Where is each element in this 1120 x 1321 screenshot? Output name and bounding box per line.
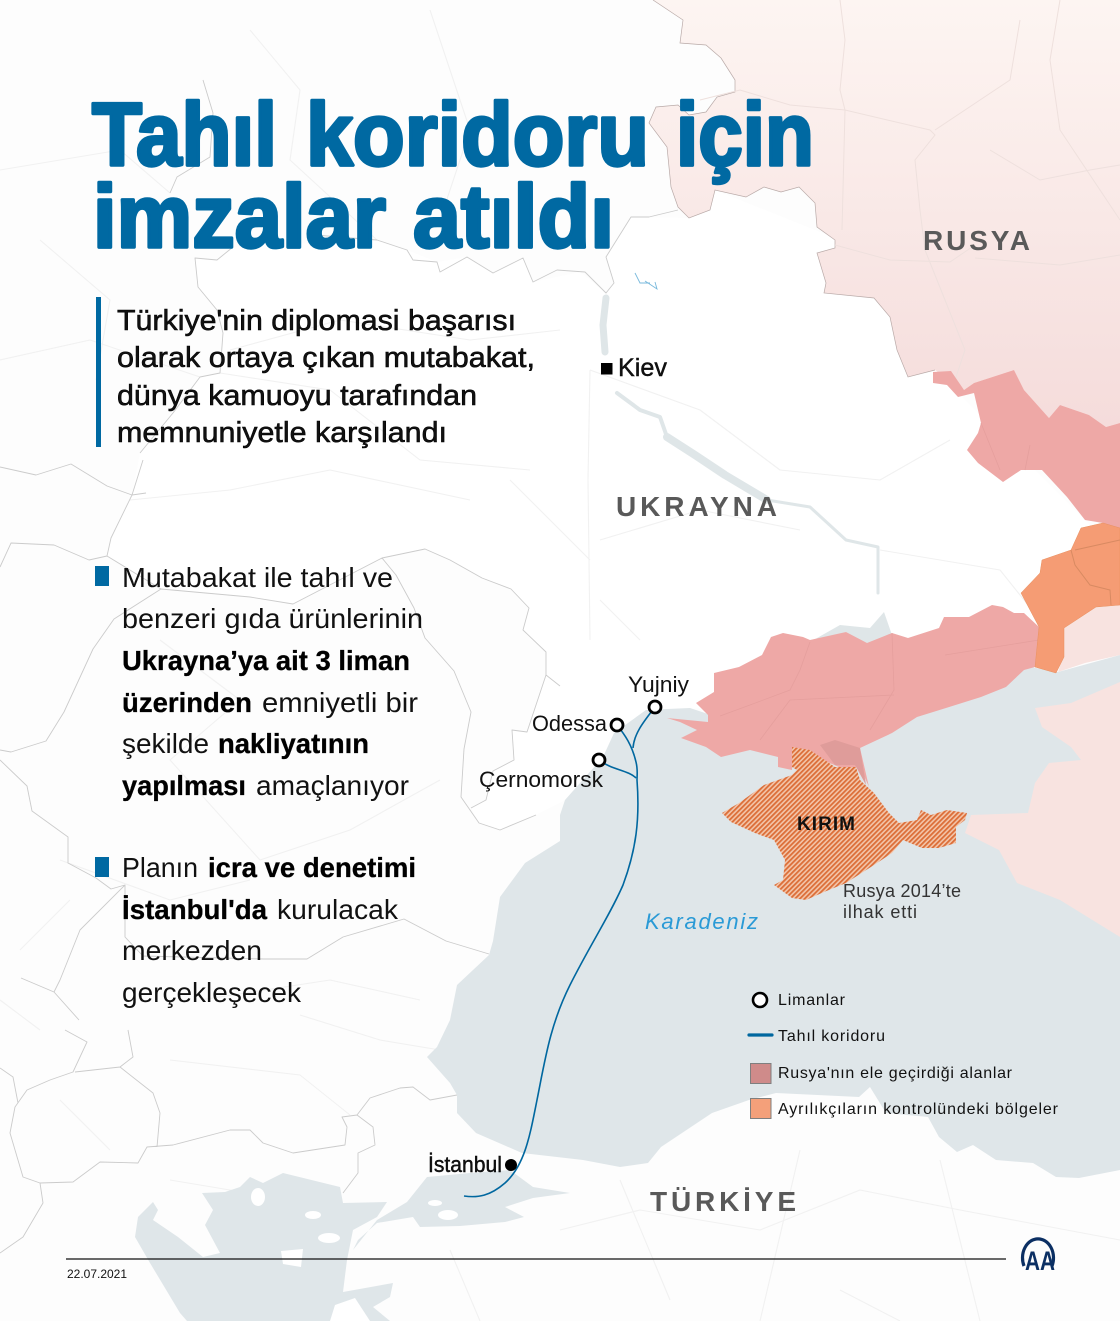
marker: Istanbul <box>505 1159 517 1171</box>
annotation: Crimea annexation <box>843 881 961 922</box>
icon: AA logo <box>1022 1239 1055 1276</box>
bullet text 1: benzeri gıda ürünlerinin <box>122 603 423 634</box>
bullet text 1: emniyetli bir <box>262 687 418 718</box>
legend: corridor: Tahıl koridoru <box>778 1028 885 1045</box>
bullet square 2 <box>95 857 109 877</box>
region: seized south <box>667 605 1039 787</box>
lead text: Türkiye'nin diplomasi başarısı <box>117 305 516 337</box>
region: Crimea <box>722 747 967 900</box>
label: Yujniy: Yujniy <box>628 672 689 697</box>
legend: ports: Limanlar <box>778 992 846 1009</box>
title: atıldı <box>413 166 614 266</box>
bullet text 2: Planın <box>122 852 198 883</box>
legend: separatist regions: Ayrılıkçıların kontrolündeki bölgeler <box>778 1101 1059 1118</box>
title: için <box>676 84 814 184</box>
lead text <box>117 305 535 449</box>
water: Sea of Marmara <box>353 1170 570 1250</box>
title: koridoru <box>306 84 649 184</box>
legend <box>749 992 1059 1118</box>
annotation: Crimea annexation: Rusya 2014’te <box>843 881 961 901</box>
label: Kiev: Kiev <box>618 354 667 382</box>
marker: Kiev <box>601 363 612 374</box>
bullet text 1: Ukrayna’ya ait 3 liman <box>122 645 410 676</box>
bullet text 2: gerçekleşecek <box>122 977 302 1008</box>
bullet text 1: nakliyatının <box>218 728 369 759</box>
bullet text 2: merkezden <box>122 935 262 966</box>
bullet square 1 <box>95 566 109 586</box>
title <box>92 84 814 266</box>
rivers <box>603 273 892 645</box>
lead text: olarak ortaya çıkan mutabakat, <box>117 342 535 374</box>
legend: seized areas: Rusya'nın ele geçirdiği alanlar <box>778 1065 1013 1082</box>
icon: AA logo: AA <box>1025 1246 1055 1276</box>
port marker: Yujniy <box>649 701 661 713</box>
bullet text 1: şekilde <box>122 728 209 759</box>
port marker: Odessa <box>611 719 623 731</box>
region: seized north-east <box>933 370 1120 530</box>
water: Black Sea and Azov <box>427 655 1120 1178</box>
label: Karadeniz: Karadeniz <box>645 909 758 934</box>
port marker: Cernomorsk <box>593 754 605 766</box>
border between separatist regions <box>1071 540 1120 605</box>
lead text: dünya kamuoyu tarafından <box>117 380 477 412</box>
region: separatist-controlled <box>1021 523 1120 673</box>
label: Rusya: RUSYA <box>923 225 1030 256</box>
annotation: Crimea annexation: ilhak etti <box>843 902 917 922</box>
label: Cernomorsk: Çernomorsk <box>479 767 604 792</box>
label: Istanbul: İstanbul <box>428 1152 502 1177</box>
label: Odessa: Odessa <box>532 711 608 736</box>
bullet text 1: üzerinden <box>122 687 252 718</box>
label: Kırım: KIRIM <box>797 814 855 835</box>
title: imzalar <box>93 166 386 266</box>
title: Tahıl <box>92 84 277 184</box>
river and region lines on seized area <box>720 642 810 716</box>
bullet text 1: amaçlanıyor <box>256 770 409 801</box>
bullet text 1: Mutabakat ile tahıl ve <box>122 562 393 593</box>
region: southern Russia, Rostov <box>1058 605 1120 672</box>
footer rule <box>66 1258 1006 1260</box>
lead accent bar <box>96 297 101 447</box>
label: Ukrayna: UKRAYNA <box>616 491 777 522</box>
bullet text 2: İstanbul'da <box>122 894 267 925</box>
date: 22.07.2021 <box>67 1267 127 1281</box>
bullet text 2: icra ve denetimi <box>208 852 416 883</box>
grain corridor route <box>464 707 655 1197</box>
region: southern Russia, Krasnodar <box>965 682 1120 937</box>
water: Aegean Sea <box>135 1173 458 1321</box>
lead text: memnuniyetle karşılandı <box>117 417 447 449</box>
Russia internal roads <box>700 0 1120 380</box>
region: Russia <box>649 0 1120 427</box>
bullet text 1 <box>122 562 423 801</box>
label: Türkiye: TÜRKİYE <box>650 1186 796 1217</box>
bullet text 2: kurulacak <box>277 894 399 925</box>
bullet text 2 <box>122 852 416 1008</box>
bullet text 1: yapılması <box>122 770 246 801</box>
